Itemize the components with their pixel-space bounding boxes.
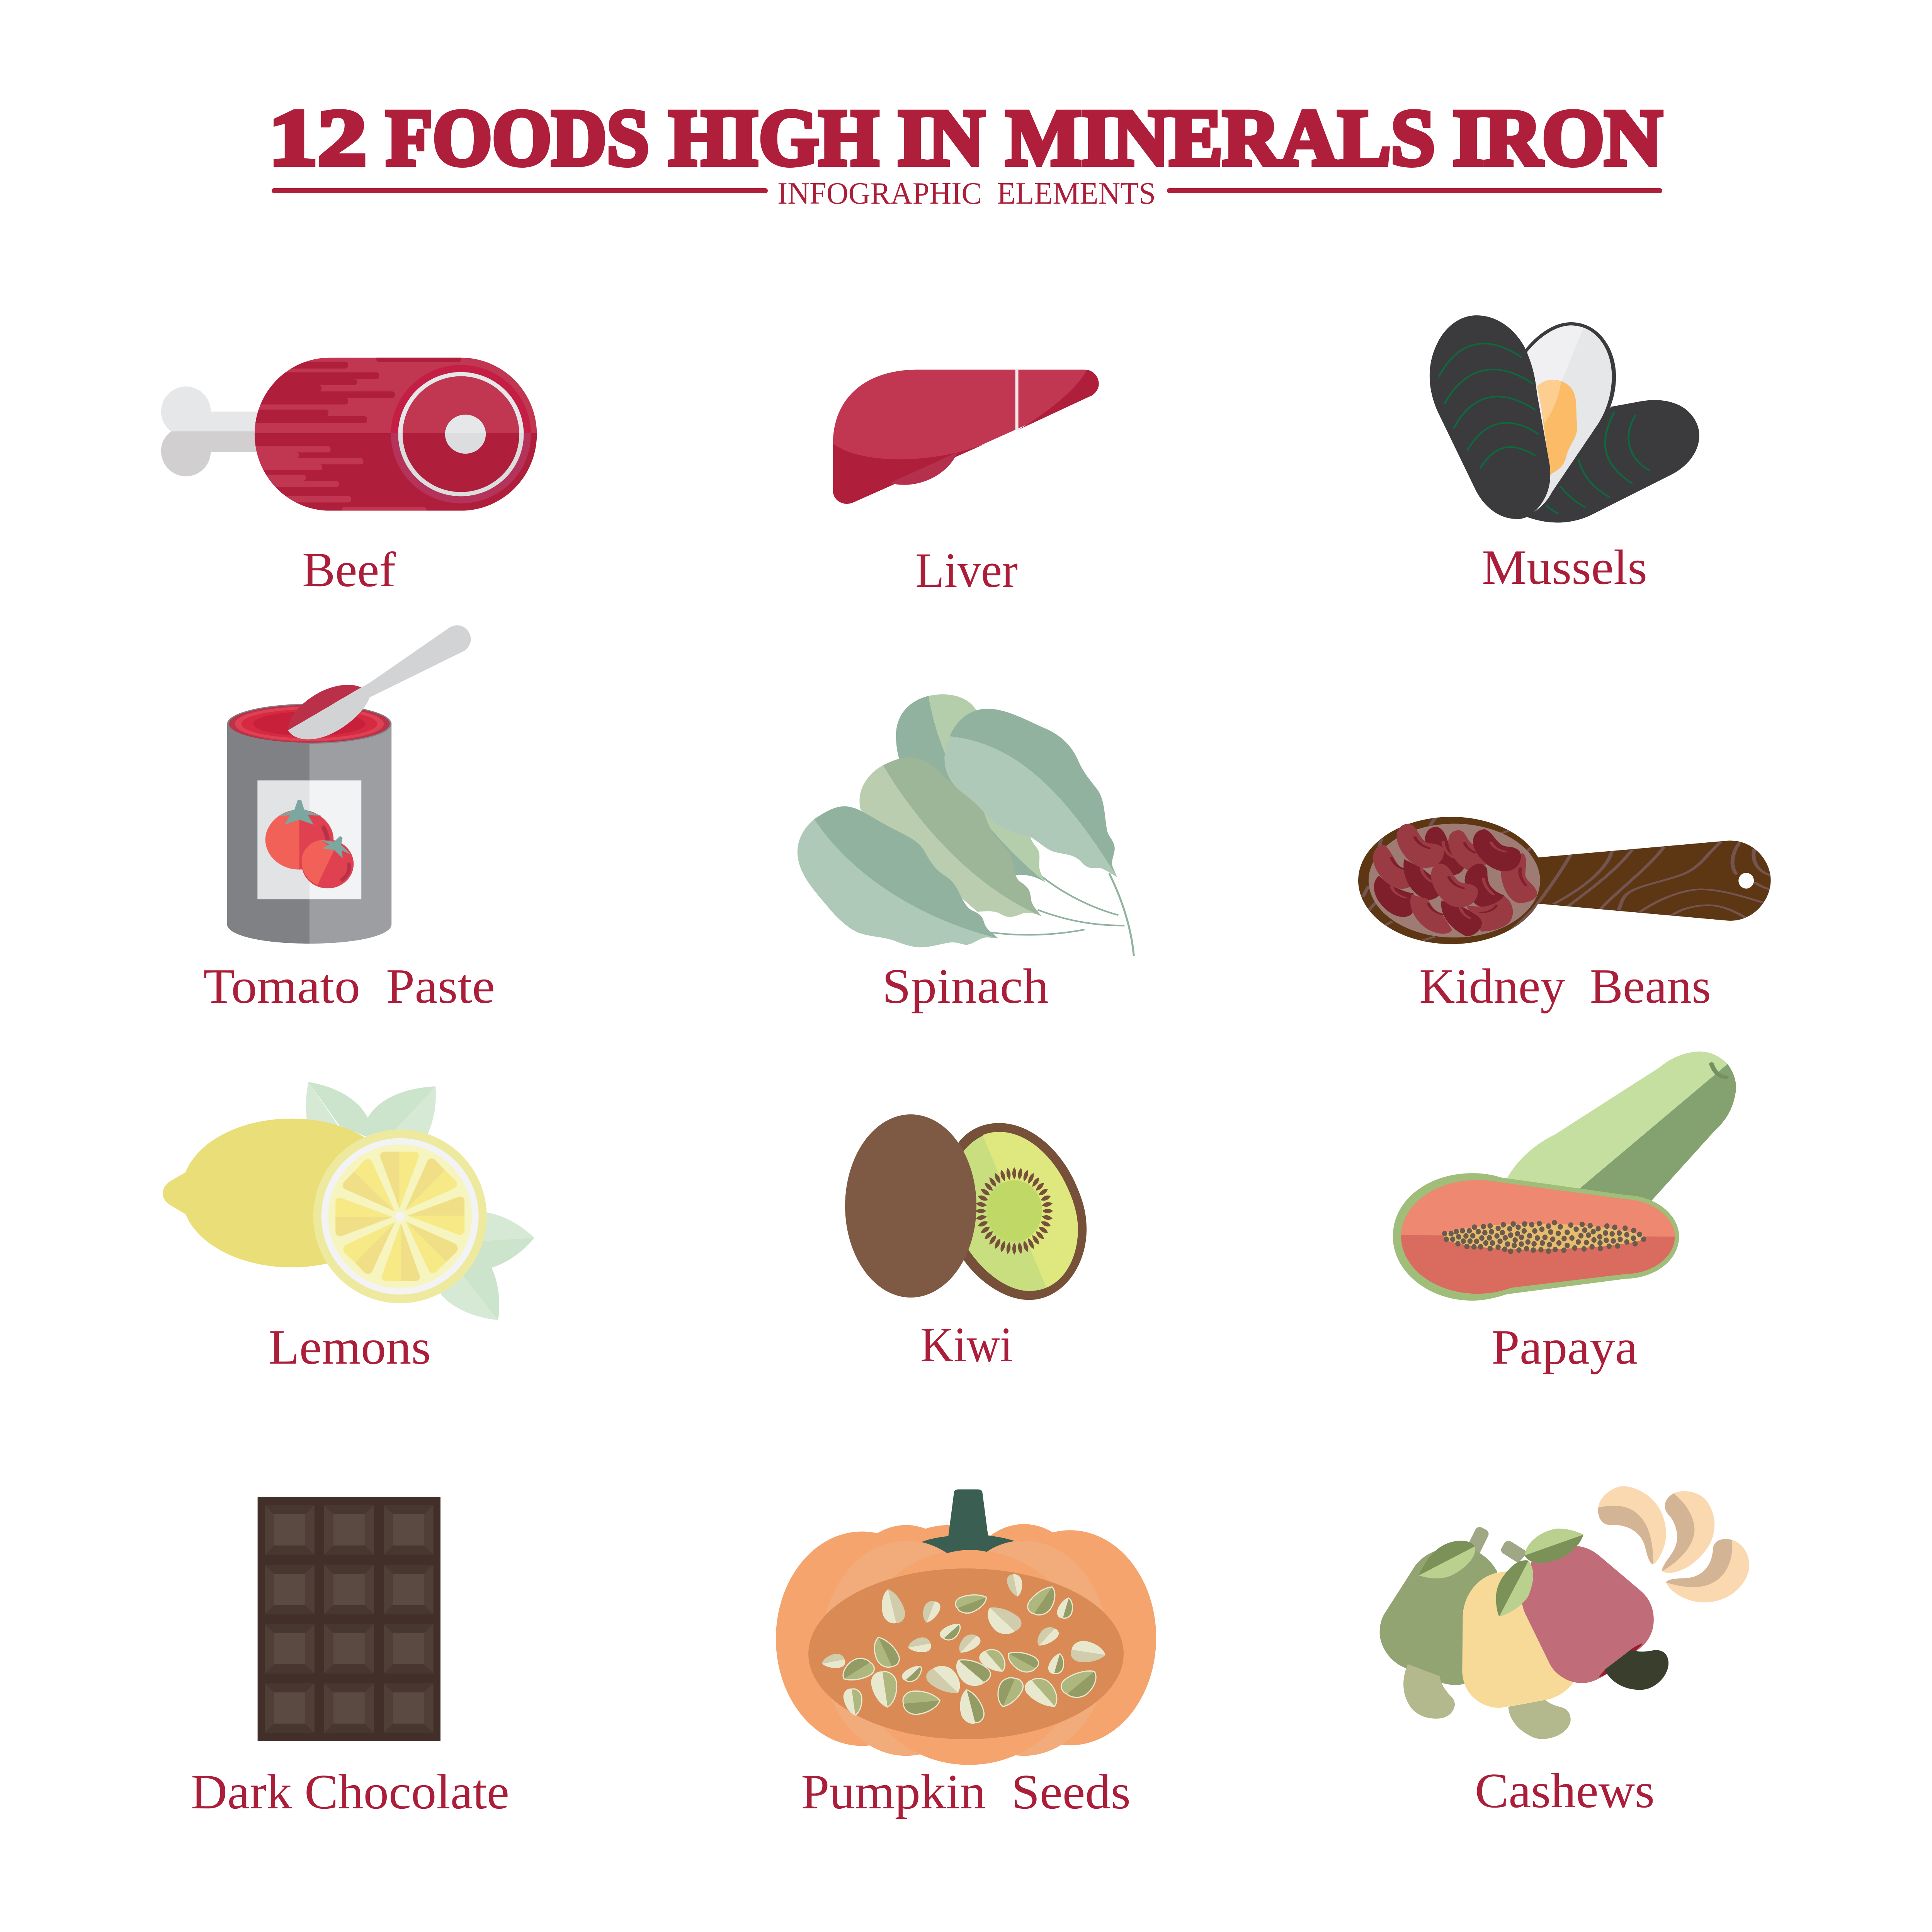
subtitle with rules: INFOGRAPHIC ELEMENTS <box>777 177 1156 211</box>
panel: tomato paste <box>203 625 495 1014</box>
title: FOODS <box>386 93 649 182</box>
icon: cashew fruits and nuts <box>1380 1486 1749 1739</box>
subtitle with rules <box>272 177 1662 211</box>
label: Spinach: Spinach <box>882 959 1049 1014</box>
label: Papaya: Papaya <box>1492 1320 1638 1374</box>
panel: liver <box>833 370 1099 598</box>
label: Kidney Beans: Kidney Beans <box>1419 959 1711 1014</box>
label: Kiwi: Kiwi <box>920 1317 1013 1372</box>
icon: pumpkin with seeds <box>776 1489 1156 1765</box>
icon: spinach <box>798 694 1134 956</box>
panel: cashews <box>1380 1486 1749 1818</box>
label: Cashews: Cashews <box>1475 1763 1655 1818</box>
title: MINERALS <box>1006 93 1435 182</box>
panel: mussels <box>1430 315 1699 595</box>
title: 12 <box>269 93 367 182</box>
panel: kiwi <box>845 1114 1087 1372</box>
icon: mussels <box>1430 315 1699 522</box>
icon: lemons <box>163 1082 534 1320</box>
panel: beef <box>161 355 544 597</box>
panel: kidney beans <box>1358 817 1771 1014</box>
title: IRON <box>1453 93 1662 182</box>
panel: spinach <box>798 694 1134 1014</box>
label: Beef: Beef <box>302 542 396 597</box>
icon: chocolate bar <box>258 1497 440 1741</box>
title <box>269 93 1662 182</box>
label: Tomato Paste: Tomato Paste <box>203 959 495 1014</box>
label: Mussels: Mussels <box>1482 540 1647 595</box>
icon: tomato paste can <box>227 625 471 944</box>
title: HIGH <box>669 93 879 182</box>
title: IN <box>897 93 985 182</box>
panel: papaya <box>1393 1051 1736 1374</box>
icon: kiwi <box>845 1114 1087 1300</box>
icon: beef <box>161 355 544 513</box>
label: Liver: Liver <box>915 543 1018 598</box>
label: Lemons: Lemons <box>269 1320 431 1374</box>
icon: kidney beans in wooden spoon <box>1358 817 1771 944</box>
panel: lemons <box>163 1082 534 1374</box>
label: Pumpkin Seeds: Pumpkin Seeds <box>801 1764 1131 1819</box>
label: Dark Chocolate: Dark Chocolate <box>191 1764 509 1819</box>
panel: dark chocolate <box>191 1497 509 1819</box>
panel: pumpkin seeds <box>776 1489 1156 1819</box>
icon: liver <box>833 370 1099 504</box>
icon: papaya <box>1393 1051 1736 1301</box>
